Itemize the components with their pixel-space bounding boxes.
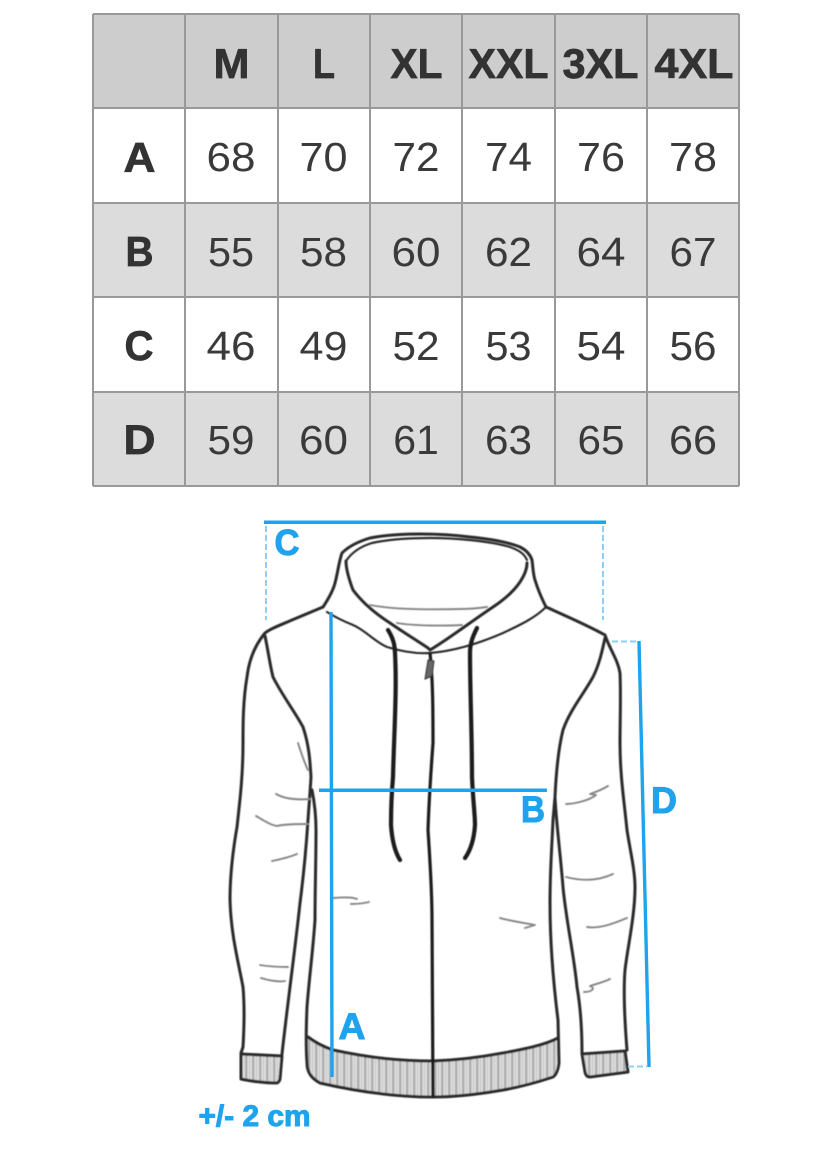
row B: 64 [576,229,626,275]
hood back neck lines [370,605,487,626]
row C: 49 [300,323,348,369]
row B: 67 [670,229,716,275]
row D: 59 [208,417,254,463]
row A: A [124,134,156,181]
drawstring right [465,628,477,858]
row B: 60 [392,229,440,275]
row D: 63 [485,417,532,463]
row B: 55 [208,229,254,275]
zipper [428,653,433,1097]
row B [126,228,716,275]
header labels [214,40,734,87]
row D: 65 [578,417,624,463]
header labels: 3XL [562,40,638,87]
header row background [93,14,739,108]
drawstring left [388,630,400,860]
dimension C: chest-top width: C [274,522,300,563]
header labels: XXL [468,40,548,87]
hoodie outline [230,534,635,1097]
row B: 62 [485,229,532,275]
row C: 56 [670,323,716,369]
fabric wrinkles [256,743,627,992]
hem ribbing [307,1037,559,1097]
size table [93,14,739,486]
row D: D [124,416,156,463]
row B: 58 [300,229,347,275]
row C: 46 [206,323,256,369]
dimension D: sleeve length: D [651,780,677,821]
header labels: M [214,40,250,87]
row A [124,134,717,181]
row B: B [126,228,154,275]
row D: 61 [393,417,439,463]
row A: 76 [577,134,625,180]
row C: C [124,322,154,369]
header labels: XL [390,40,442,87]
row D [124,416,717,463]
row C: 52 [392,323,440,369]
header labels: L [313,40,335,87]
row A: 70 [300,134,348,180]
hoodie drawing [230,534,635,1097]
left cuff [241,1054,282,1083]
row D: 60 [299,417,348,463]
right cuff [582,1051,628,1077]
row A: 72 [392,134,440,180]
zipper pull [425,660,434,679]
row C [124,322,716,369]
row D: 66 [669,417,717,463]
row D background [93,392,739,486]
row C: 54 [576,323,626,369]
tolerance note: +/- 2 cm [198,1100,310,1133]
row A: 68 [206,134,256,180]
dimension B: chest width: B [521,789,545,830]
row B background [93,203,739,297]
dimension A: body length: A [338,1006,366,1047]
row A: 78 [669,134,717,180]
header labels: 4XL [654,40,734,87]
dimension B: chest width [319,788,547,830]
dimension D: sleeve length [612,641,677,1067]
row A: 74 [485,134,532,180]
row C: 53 [486,323,532,369]
dimension C: chest-top width [264,520,606,620]
